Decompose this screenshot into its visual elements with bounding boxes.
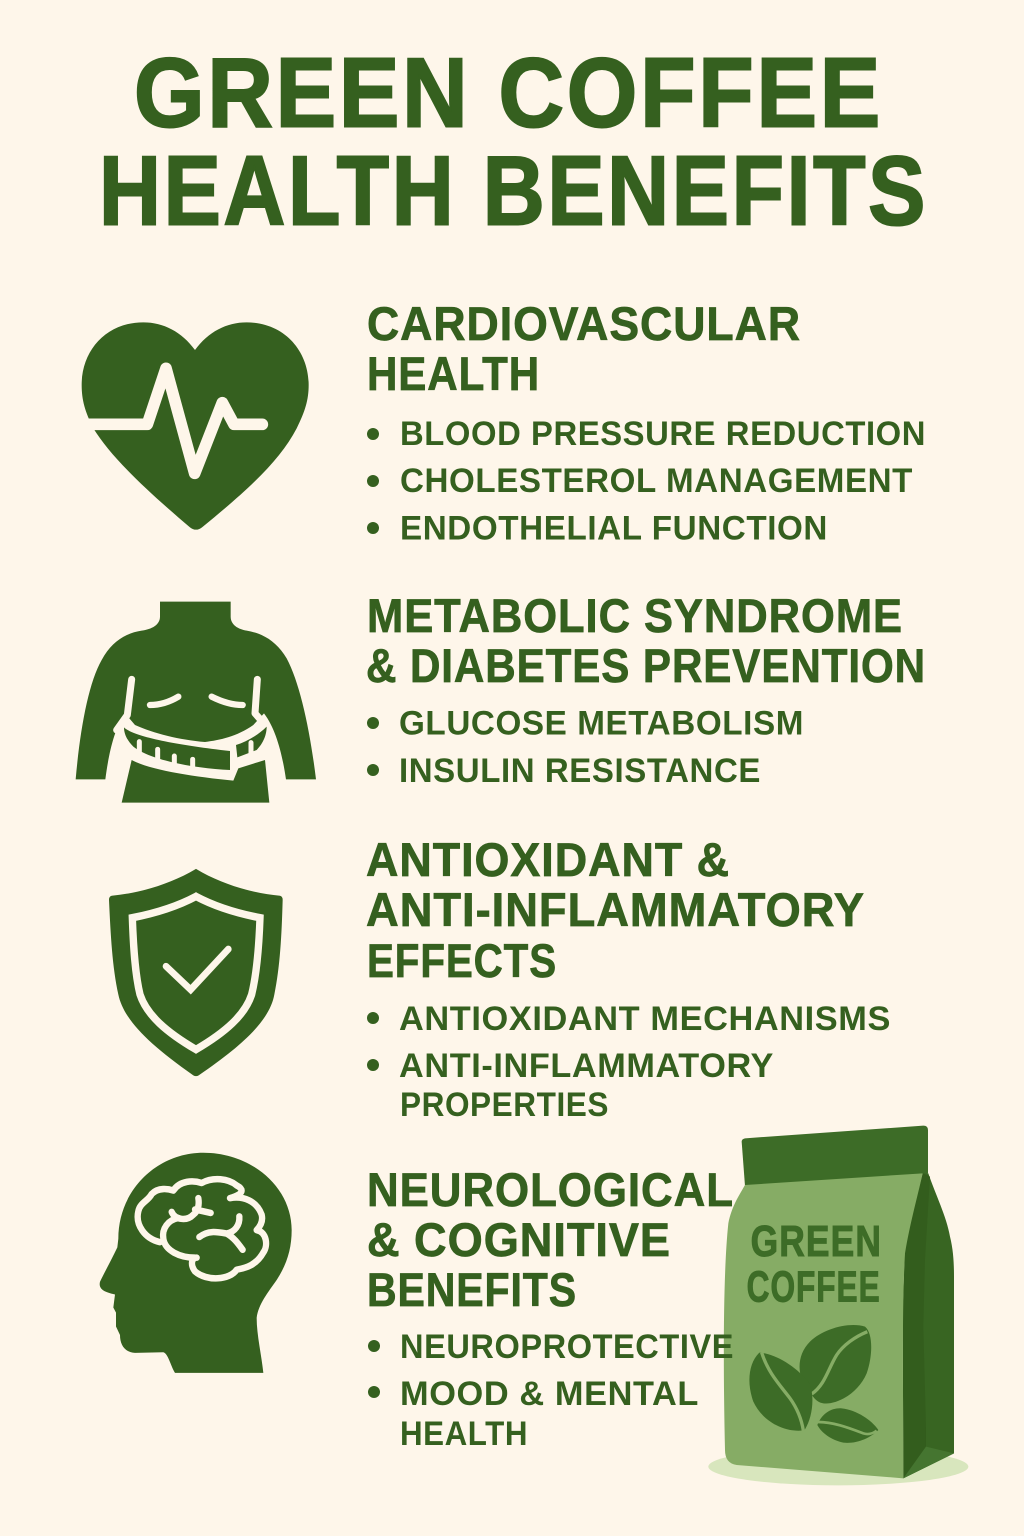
heading: metabolic syndrome and diabetes prevention: METABOLIC SYNDROME (367, 589, 903, 642)
heading: cardiovascular health: CARDIOVASCULAR (367, 297, 801, 350)
bullet list: metabolic: INSULIN RESISTANCE (399, 752, 761, 790)
title: GREEN COFFEE (134, 38, 883, 148)
icon: torso with measuring tape (76, 602, 316, 803)
heading: antioxidant and anti-inflammatory effects: EFFECTS (367, 934, 557, 987)
heading: neurological and cognitive benefits: NEUROLOGICAL (367, 1163, 734, 1216)
bullet list: metabolic: GLUCOSE METABOLISM (399, 704, 804, 742)
bullet list: metabolic (367, 704, 804, 790)
bullet list: neurological: MOOD & MENTAL (400, 1375, 699, 1413)
bag label: COFFEE (747, 1263, 881, 1312)
heading: neurological and cognitive benefits: BENEFITS (367, 1263, 577, 1316)
heading: antioxidant and anti-inflammatory effects (366, 833, 865, 987)
bullet list: neurological: HEALTH (400, 1415, 528, 1453)
title (99, 38, 928, 246)
bag side gusset (903, 1173, 954, 1478)
section: antioxidant (366, 833, 891, 1124)
bullet list: antioxidant: ANTIOXIDANT MECHANISMS (399, 1000, 891, 1038)
section: metabolic syndrome (366, 589, 926, 790)
heading: metabolic syndrome and diabetes prevention: & DIABETES PREVENTION (366, 639, 926, 692)
bullet list: antioxidant (367, 1000, 891, 1124)
heading: cardiovascular health (367, 297, 801, 400)
bullet list: antioxidant: PROPERTIES (400, 1086, 609, 1124)
heading: antioxidant and anti-inflammatory effects: ANTI-INFLAMMATORY (366, 883, 865, 936)
heading: antioxidant and anti-inflammatory effects: ANTIOXIDANT & (366, 833, 730, 886)
icon: heart with pulse line (82, 322, 309, 530)
bullet list: cardiovascular: CHOLESTEROL MANAGEMENT (400, 462, 913, 500)
illustration: green coffee bag (708, 1126, 968, 1485)
icon: shield with check mark (109, 869, 283, 1076)
heading: neurological and cognitive benefits (367, 1163, 734, 1316)
section: cardiovascular health (367, 297, 926, 548)
bullet list: antioxidant: ANTI-INFLAMMATORY (399, 1047, 774, 1085)
bullet list: neurological (368, 1328, 734, 1453)
bag label (747, 1217, 882, 1312)
bullet list: neurological: NEUROPROTECTIVE (400, 1328, 734, 1366)
title: HEALTH BENEFITS (99, 136, 928, 246)
heading: neurological and cognitive benefits: & COGNITIVE (367, 1213, 671, 1266)
bullet list: cardiovascular (367, 415, 926, 548)
section: neurological (367, 1163, 734, 1453)
icon: head with brain (100, 1153, 292, 1373)
bullet list: cardiovascular: ENDOTHELIAL FUNCTION (400, 510, 828, 548)
heading: cardiovascular health: HEALTH (367, 347, 540, 400)
coffee beans (749, 1325, 878, 1443)
bullet list: cardiovascular: BLOOD PRESSURE REDUCTION (400, 415, 926, 453)
bag top flap (742, 1126, 928, 1186)
bag label: GREEN (751, 1217, 882, 1266)
heading: metabolic syndrome and diabetes prevention (366, 589, 926, 692)
bag ground shadow (708, 1448, 968, 1485)
bag front panel (724, 1173, 923, 1478)
